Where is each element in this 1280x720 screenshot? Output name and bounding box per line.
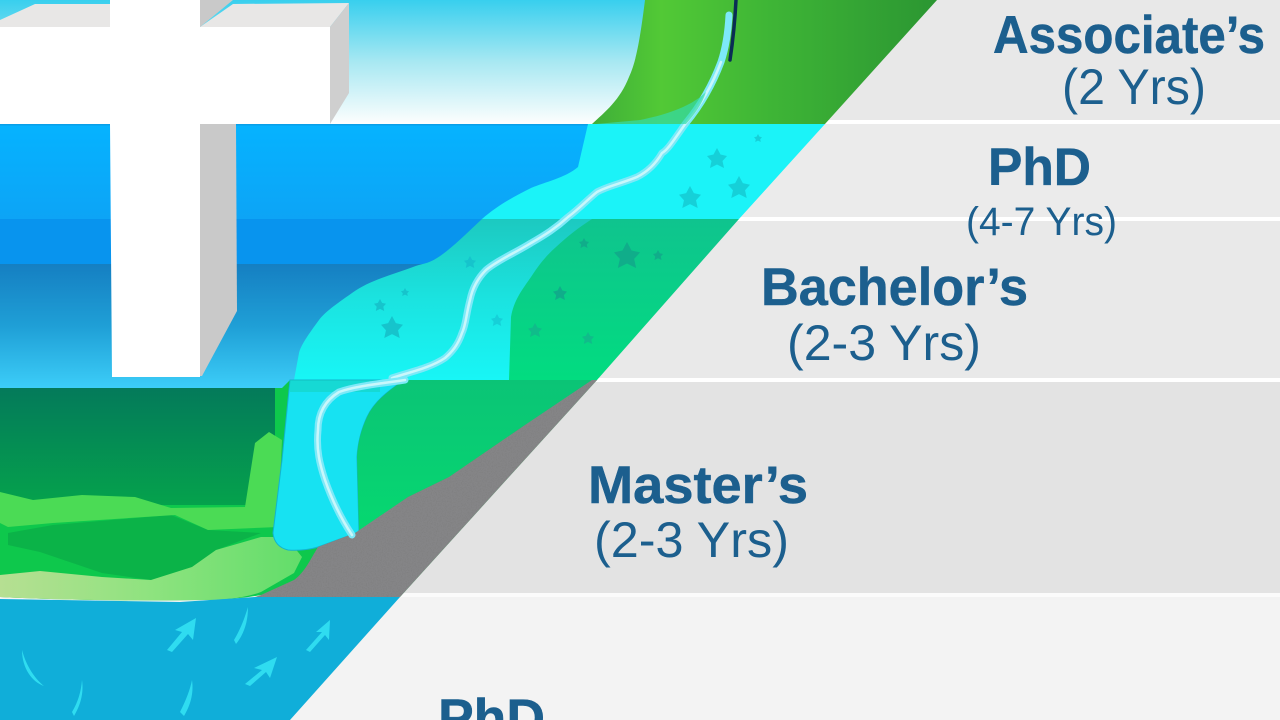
cross front face — [0, 0, 330, 377]
heading: Bachelor's: Bachelor’s — [761, 258, 1028, 317]
river lower bend highlight — [317, 380, 405, 535]
cross post top side — [200, 0, 233, 27]
river: light stream — [317, 0, 736, 535]
streak 2 — [22, 650, 44, 686]
pale green bottom band — [0, 537, 302, 600]
arrow 2 — [245, 657, 277, 686]
cross arm top face right — [200, 3, 349, 27]
panel: teal band above lower pool — [290, 380, 380, 392]
panel: teal lower river bank — [294, 219, 610, 380]
panel: lower green land — [0, 380, 597, 600]
label: 4-7 Yrs: (4-7 Yrs) — [966, 200, 1117, 244]
label: 2 Yrs: (2 Yrs) — [1062, 59, 1206, 115]
leaf marks — [374, 134, 762, 344]
panel: sky band — [0, 0, 680, 124]
arrow 1 — [167, 618, 196, 652]
panel: blue water bands — [0, 124, 600, 388]
panel: upper green hillside — [592, 0, 937, 124]
cross post right side — [200, 124, 237, 376]
arrows in bottom water — [22, 607, 330, 716]
heading: Master's: Master’s — [588, 456, 808, 515]
dark river source — [730, 0, 736, 60]
panel: bottom water band — [0, 597, 400, 720]
streak 3 — [72, 680, 83, 716]
arrow 3 — [306, 620, 330, 652]
dark green upper field — [0, 388, 275, 505]
river inner highlight — [392, 62, 721, 378]
label: 2-3 Yrs master: (2-3 Yrs) — [594, 512, 789, 568]
river tail crossing green — [596, 92, 706, 124]
heading: Associate's: Associate’s — [993, 6, 1265, 65]
cross arm right side — [330, 3, 349, 124]
icon: white 3D cross — [0, 0, 349, 377]
cross arm top face left — [0, 4, 110, 27]
panel: green field beside river — [509, 219, 739, 380]
streak 4 — [180, 680, 193, 716]
panel: cyan lower river pool — [273, 380, 404, 550]
river lower bend outer — [317, 380, 405, 535]
panel: cyan upper river bank — [482, 124, 825, 219]
panel: gray gravel wedge — [255, 380, 597, 597]
label: 2-3 Yrs bachelor: (2-3 Yrs) — [787, 315, 981, 371]
dark green lower field — [8, 515, 261, 580]
river outer stream — [392, 15, 729, 378]
panel: right green field — [357, 380, 597, 532]
light green band — [0, 432, 282, 530]
heading: PhD: PhD — [988, 138, 1091, 197]
streak 1 — [234, 607, 248, 644]
